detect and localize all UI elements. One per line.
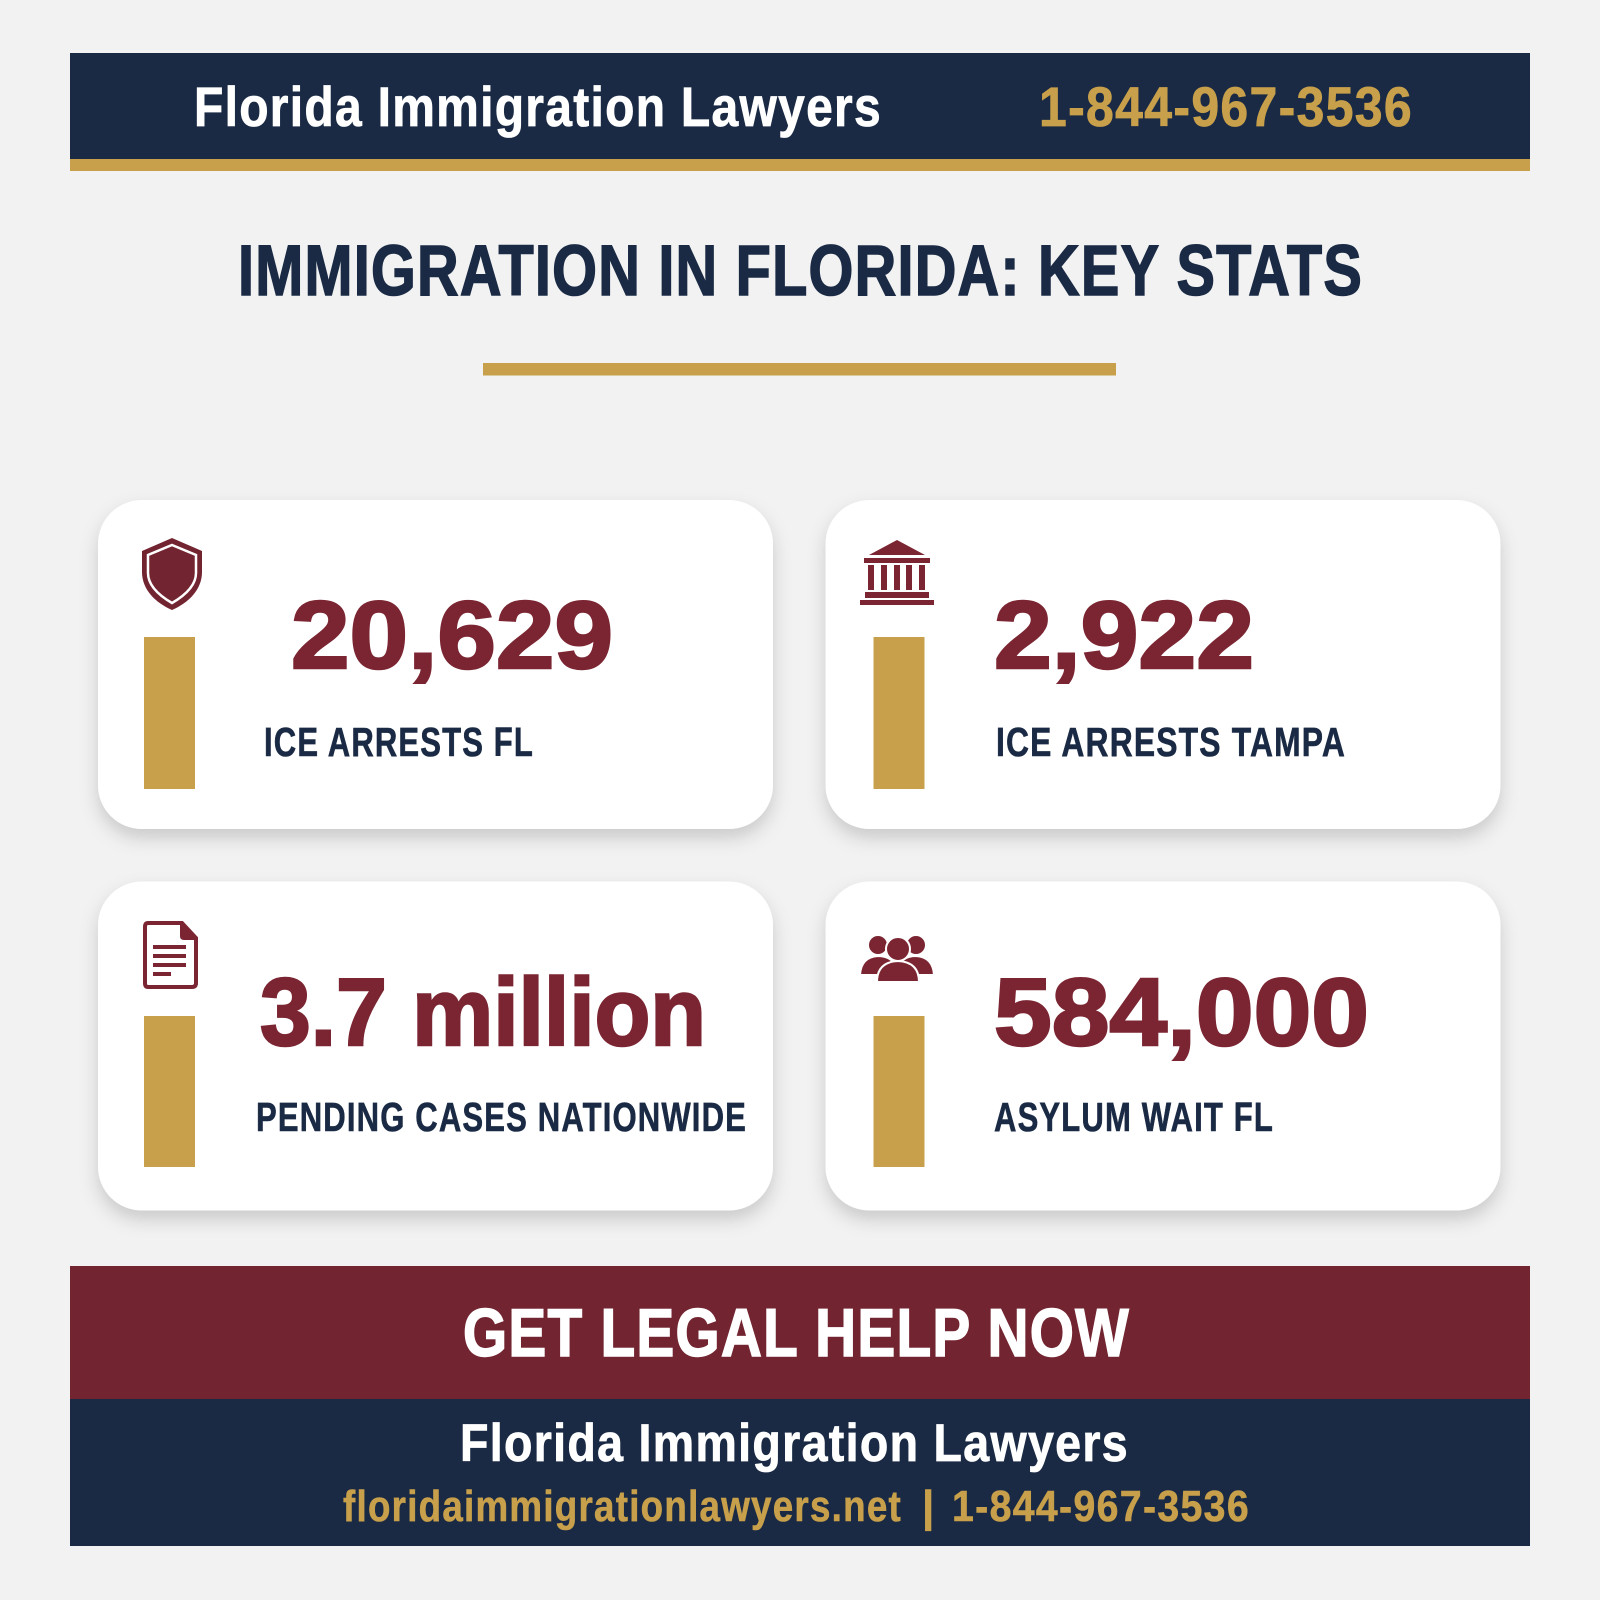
panel: asylum wait Florida bbox=[826, 882, 1500, 1210]
stat label: PENDING CASES NATIONWIDE bbox=[256, 1094, 747, 1140]
stat label: ICE ARRESTS FL bbox=[264, 719, 534, 765]
icon: shield bbox=[142, 538, 202, 610]
footer contact line: 1-844-967-3536 bbox=[952, 1482, 1250, 1531]
stat label: ICE ARRESTS TAMPA bbox=[996, 719, 1346, 765]
stat value: 2,922 bbox=[994, 582, 1254, 689]
panel: ICE arrests Tampa bbox=[826, 500, 1500, 829]
title: IMMIGRATION IN FLORIDA: KEY STATS bbox=[238, 232, 1363, 311]
stat value: 20,629 bbox=[291, 582, 613, 689]
footer firm name: Florida Immigration Lawyers bbox=[460, 1414, 1129, 1473]
gold bar bbox=[144, 637, 195, 789]
footer contact line: | bbox=[922, 1482, 934, 1532]
panel: pending cases nationwide bbox=[98, 882, 773, 1210]
stat value: 3.7 million bbox=[260, 959, 706, 1066]
call to action text: GET LEGAL HELP NOW bbox=[463, 1295, 1130, 1371]
gold bar bbox=[874, 1016, 924, 1167]
icon: people bbox=[860, 935, 934, 982]
panel: ICE arrests Florida bbox=[98, 500, 773, 829]
header banner bbox=[70, 53, 1530, 171]
footer contact line: floridaimmigrationlawyers.net bbox=[343, 1482, 902, 1531]
footer bbox=[70, 1399, 1530, 1546]
stat label: ASYLUM WAIT FL bbox=[994, 1094, 1274, 1140]
phone number: 1-844-967-3536 bbox=[1039, 75, 1413, 138]
icon: courthouse bbox=[860, 540, 934, 605]
icon: document bbox=[145, 922, 197, 987]
title underline bbox=[483, 363, 1116, 376]
call to action banner bbox=[70, 1266, 1530, 1399]
stat value: 584,000 bbox=[994, 959, 1369, 1066]
gold bar bbox=[874, 637, 924, 789]
firm name: Florida Immigration Lawyers bbox=[194, 75, 882, 138]
gold bar bbox=[144, 1016, 195, 1167]
